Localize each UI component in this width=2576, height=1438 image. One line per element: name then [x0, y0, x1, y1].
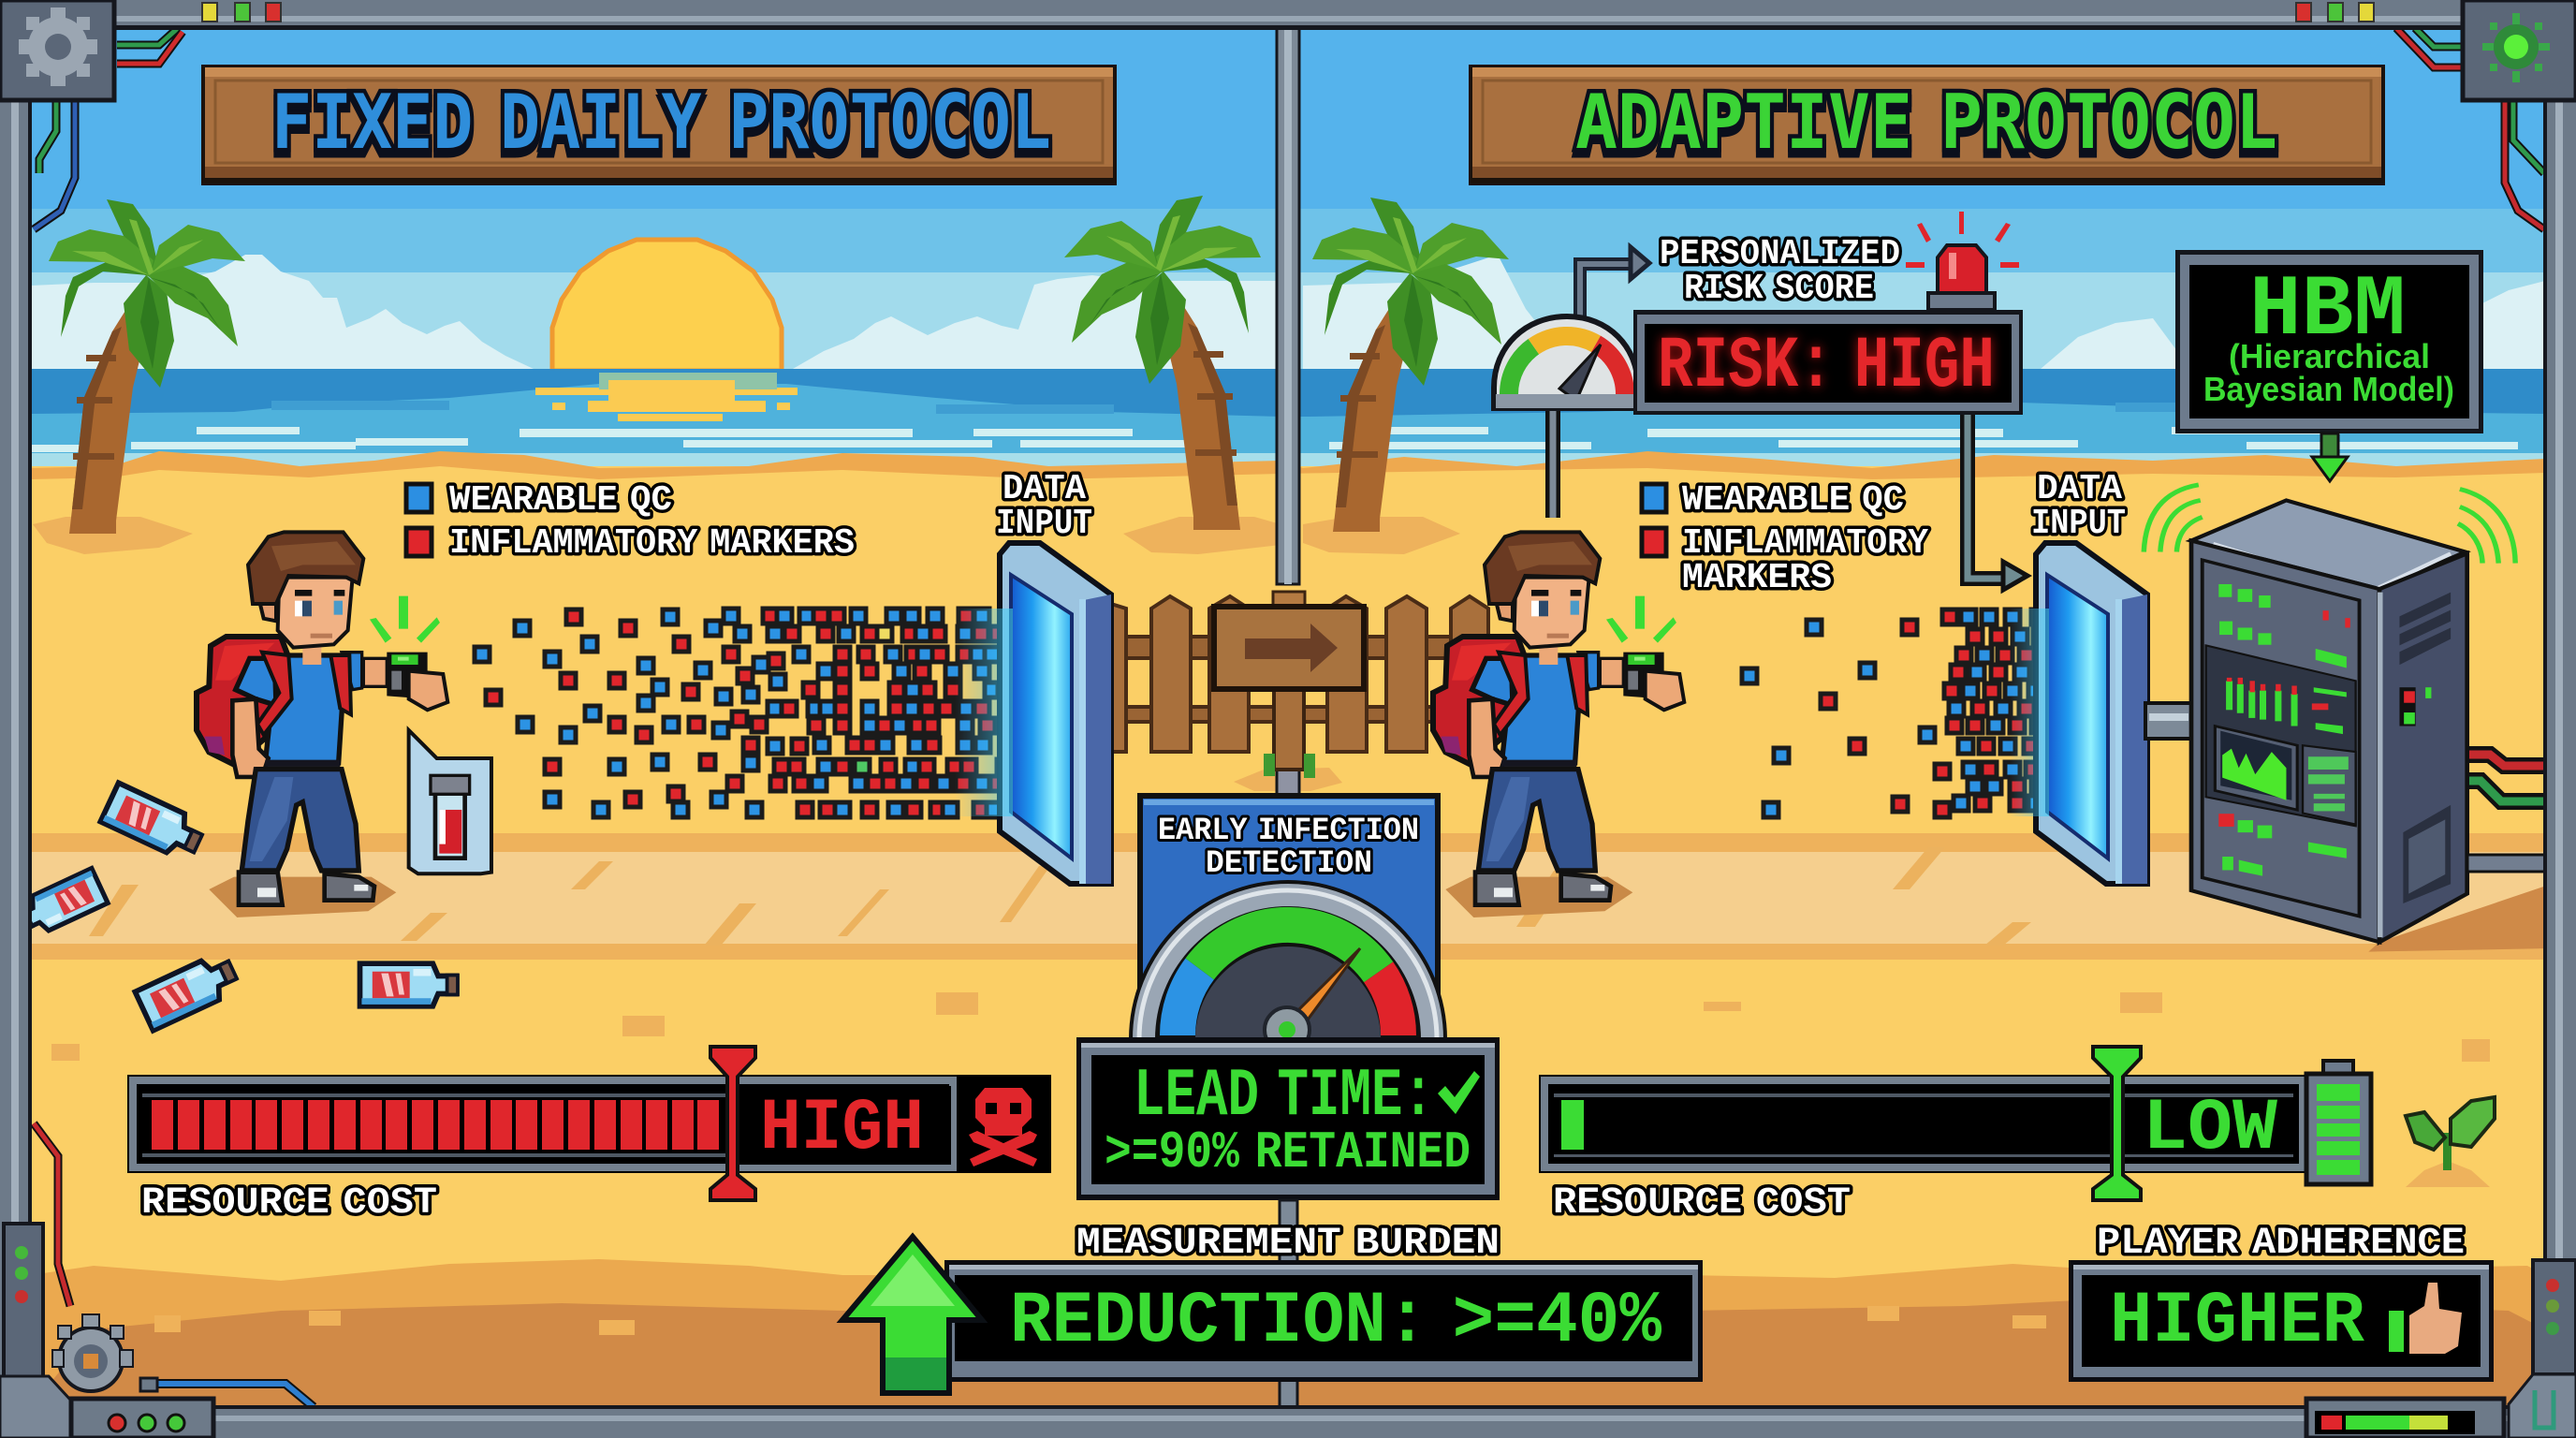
label: resource cost left: RESOURCE COST [141, 1182, 437, 1225]
label: data input left: INPUT [996, 504, 1092, 544]
title sign: fixed daily protocol [201, 65, 1117, 185]
data input portal: left [955, 543, 1111, 884]
palm tree: left beach [49, 199, 245, 534]
level meter: bottom right [2306, 1399, 2504, 1438]
legend: right panel [1642, 480, 1928, 598]
early infection detection gauge panel [1129, 796, 1447, 1198]
icon: full battery [2306, 1061, 2371, 1184]
label: data input left [996, 469, 1092, 544]
label: data input right [2031, 469, 2126, 544]
early infection detection gauge panel: DETECTION [1206, 846, 1372, 882]
threshold marker [710, 1047, 755, 1200]
character: player with wearable, left [197, 532, 447, 917]
resource cost bar: low: LOW [2143, 1088, 2277, 1170]
title sign: adaptive protocol [1469, 65, 2385, 185]
personalised risk score heading with elbow arrow [1580, 234, 1900, 318]
label: measurement burden: MEASUREMENT BURDEN [1076, 1223, 1500, 1265]
personalised risk score heading with elbow arrow: RISK SCORE [1684, 269, 1874, 309]
sky background [0, 0, 2576, 371]
legend: right panel: MARKERS [1682, 558, 1832, 598]
gear: lower left [52, 1314, 157, 1391]
pole section between readouts [1280, 1200, 1297, 1407]
frame: bottom bar [0, 1405, 2576, 1438]
icon: skull and crossbones [969, 1088, 1037, 1167]
hbm model display: Bayesian Model) [2203, 370, 2454, 408]
server vent: upper [2399, 593, 2451, 665]
resource cost bar: high [127, 1047, 1051, 1200]
label: data input right: INPUT [2031, 504, 2126, 544]
label: resource cost right: RESOURCE COST [1553, 1182, 1851, 1225]
corner box with gear: top left [0, 0, 114, 100]
frame: top bar [0, 0, 2576, 30]
panel divider pole [1277, 27, 1299, 584]
resource cost bar: low [1539, 1047, 2308, 1200]
icon: green up arrow [842, 1237, 982, 1393]
hbm model display: (Hierarchical [2229, 337, 2430, 375]
cables: top right [2396, 28, 2544, 229]
icon: sprout [2406, 1097, 2495, 1187]
legend: left panel: WEARABLE QC [449, 480, 672, 521]
corner box: bottom left [0, 1376, 213, 1438]
higher adherence readout: HIGHER [2110, 1281, 2364, 1363]
frame: right pillar [2543, 98, 2576, 1438]
cables: bottom left [34, 1123, 314, 1407]
red cells [152, 1100, 719, 1150]
data stream: left, many daily samples [475, 609, 1035, 817]
label: data input left: DATA [1003, 469, 1086, 509]
connector pipes from risk display [1553, 408, 2027, 590]
title text: FIXED DAILY PROTOCOL [271, 79, 1051, 166]
corner box: bottom right [2509, 1374, 2576, 1438]
risk high display: RISK: HIGH [1658, 326, 1995, 408]
gauge dial [1129, 880, 1447, 1198]
data input portal: right [2010, 543, 2147, 884]
right side wires [2467, 755, 2546, 872]
character: player with wearable, right [1433, 532, 1684, 917]
legend: left panel [406, 480, 855, 564]
corner box with green light: top right [2463, 0, 2576, 100]
pipe: portal to server [2145, 703, 2192, 739]
lead time readout: LEAD TIME: [1134, 1058, 1434, 1135]
wifi signal arcs [2144, 485, 2515, 564]
threshold marker [2093, 1047, 2141, 1200]
status lights: top right [2296, 3, 2374, 22]
icon: red alarm siren [1906, 212, 2019, 310]
status lights: top left [202, 3, 281, 22]
sea and waves [31, 369, 2545, 466]
direction signpost with arrow [1214, 592, 1364, 800]
sun [552, 240, 782, 371]
personalised risk score heading with elbow arrow: PERSONALIZED [1660, 234, 1900, 274]
label: data input right: DATA [2037, 469, 2122, 509]
icon: blood sample tube card [409, 730, 491, 873]
palm tree: centre left [1064, 196, 1261, 530]
data stream: right, fewer targeted samples [1742, 609, 2059, 817]
risk high display [1633, 310, 2023, 415]
reduction readout [944, 1260, 1703, 1382]
palm tree: right beach [1312, 198, 1509, 532]
arrow: hbm to server [2312, 433, 2348, 481]
icon: thumbs up [2389, 1283, 2462, 1354]
heading: EARLY INFECTION [1158, 814, 1419, 849]
icon: risk mini gauge [1494, 316, 1638, 408]
green cell [1561, 1100, 1584, 1150]
wooden fence [1111, 596, 1488, 752]
frame: left pillar [0, 98, 32, 1438]
legend: left panel: INFLAMMATORY MARKERS [449, 523, 855, 564]
label: player adherence: PLAYER ADHERENCE [2097, 1223, 2465, 1265]
higher adherence readout [2069, 1260, 2494, 1382]
title text: ADAPTIVE PROTOCOL [1575, 79, 2277, 166]
hbm model display: HBM [2249, 261, 2406, 360]
sand [31, 451, 2545, 1407]
lead time readout [1076, 1037, 1500, 1200]
server rack [2144, 485, 2551, 952]
check mark [1438, 1071, 1480, 1114]
legend: right panel: INFLAMMATORY [1682, 523, 1928, 564]
reduction readout: REDUCTION: >=40% [1010, 1281, 1661, 1363]
palm shadows [33, 517, 1460, 554]
status box: lower left [4, 1224, 43, 1378]
lead time readout: >=90% RETAINED [1105, 1123, 1471, 1182]
cables: top left [34, 28, 183, 229]
legend: right panel: WEARABLE QC [1682, 480, 1904, 521]
resource cost bar: high: HIGH [760, 1088, 924, 1170]
discarded bottles [12, 783, 458, 1031]
hbm model display [2175, 250, 2483, 433]
status box: lower right [2533, 1260, 2576, 1374]
clouds [31, 255, 2545, 369]
